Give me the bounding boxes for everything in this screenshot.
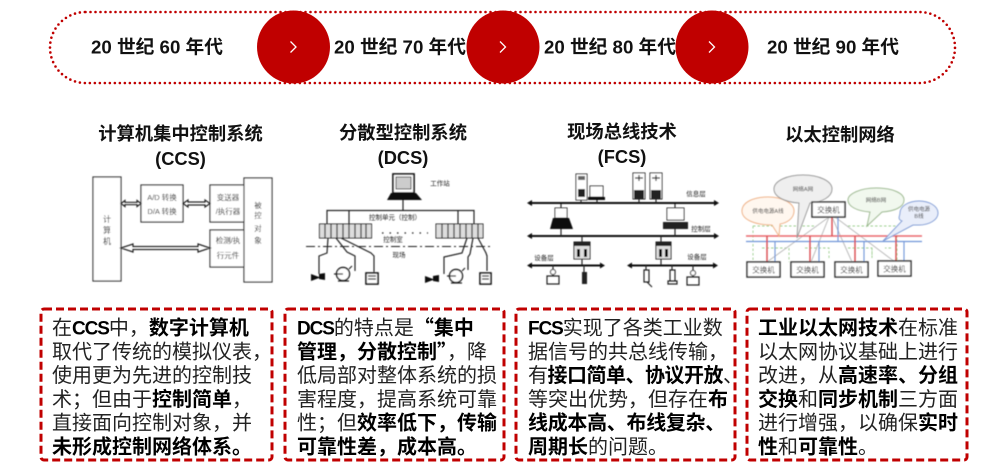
panel: Ethernet description: 性和可靠性。 [758,436,878,458]
panel: CCS description: 使用更为先进的控制技 [52,364,252,387]
panel: DCS description: 害程度，提高系统可靠 [297,388,497,411]
diagram: CCS block diagram: 算 [103,225,111,235]
heading: FCS [567,121,677,167]
callout: blue [883,201,938,241]
diagram: DCS architecture: 现场 [392,250,406,259]
panel: CCS description [41,309,272,460]
panel: DCS description: 管理，分散控制”，降 [297,335,487,364]
diagram: CCS block diagram: 计 [103,214,111,224]
label: 1990s: 20 世纪 90 年代 [767,36,899,58]
heading: CCS [98,123,263,169]
diagram: CCS block diagram: 变送器 [217,192,240,202]
timeline: decades [50,10,955,84]
heading: DCS: (DCS) [378,147,428,168]
diagram: DCS architecture: 控制单元（控制） [369,212,421,222]
panel: FCS description: 线成本高、布线复杂、 [528,411,725,435]
panel: DCS description: 性；但效率低下，传输 [297,412,497,435]
diagram: CCS block diagram: 象 [254,235,262,245]
diagram: CCS block diagram: 被 [254,200,262,210]
panel: FCS description: 据信号的共总线传输， [528,340,728,363]
panel: Ethernet description: 进行增强，以确保实时 [758,411,958,435]
switch: top: 交换机 [817,204,840,214]
diagram: CCS block diagram: /执行器 [216,206,241,216]
arrow node 3 [676,10,748,84]
diagram: DCS architecture: 控制室 [383,234,403,244]
diagram: CCS block diagram [93,177,272,282]
diagram: FCS bus topology: 设备层 [687,252,707,261]
callout: gray [774,175,832,238]
switch: top [812,202,845,217]
heading: FCS: (FCS) [598,146,646,167]
diagram: CCS block diagram: 控 [254,210,262,220]
callout: blue: 供电电源 [908,205,930,213]
diagram: CCS block diagram: 检测/执 [216,235,241,245]
callout: orange: 供电电源A线 [752,207,784,215]
heading: DCS: 分散型控制系统 [339,122,467,143]
diagram: CCS block diagram: 机 [103,236,111,246]
heading: DCS [339,122,467,168]
arrow node 1 [257,10,330,84]
switch: 3: 交换机 [840,264,863,274]
panel: Ethernet description: 改进，从高速率、分组 [758,363,958,387]
switch: 3 [835,262,868,277]
heading: Ethernet: 以太控制网络 [785,124,895,145]
panel: CCS description: 取代了传统的模拟仪表， [52,340,272,363]
panel: CCS description: 未形成控制网络体系。 [52,434,252,458]
diagram: CCS block diagram: D/A 转换 [147,206,177,216]
panel: FCS description [516,309,742,460]
switch: 4: 交换机 [883,264,906,274]
panel: Ethernet description: 交换和同步机制三方面 [758,387,958,411]
callout: gray: 网络A网 [793,185,814,193]
switch: 2: 交换机 [796,264,819,274]
panel: FCS description: 周期长的问题。 [528,436,668,458]
switch: 4 [878,261,911,276]
panel: CCS description: 术；但由于控制简单， [52,388,252,411]
panel: FCS description: FCS实现了各类工业数 [528,316,723,340]
panel: DCS description: 低局部对整体系统的损 [297,364,497,387]
panel: FCS description: 等突出优势，但存在布 [528,388,728,411]
panel: CCS description: 直接面向控制对象，并 [52,412,252,435]
label: 1970s: 20 世纪 70 年代 [334,36,466,58]
callout: orange [742,197,794,236]
diagram: FCS bus topology: 设备层 [534,253,554,262]
heading: CCS: 计算机集中控制系统 [98,123,263,144]
label: 1960s: 20 世纪 60 年代 [91,36,223,58]
heading: FCS: 现场总线技术 [567,121,677,142]
diagram: CCS block diagram: 对 [254,223,262,233]
label: 1980s: 20 世纪 80 年代 [544,36,676,58]
panel: CCS description: 在CCS中，数字计算机 [52,316,249,340]
panel: DCS description [285,309,504,460]
callout: green [848,188,904,226]
arrow node 2 [466,10,540,84]
switch: 1: 交换机 [752,264,775,274]
switch: 2 [791,262,824,277]
panel: Ethernet description: 以太网协议基础上进行 [758,340,958,363]
diagram: CCS block diagram: A/D 转换 [147,192,177,202]
callout: blue: B线 [914,212,924,220]
heading: CCS: (CCS) [155,148,206,169]
panel: FCS description: 有接口简单、协议开放、 [528,364,742,387]
panel: DCS description: 可靠性差，成本高。 [297,434,477,458]
diagram: DCS architecture: 工作站 [430,178,450,188]
callout: green: 网络B网 [866,196,887,204]
diagram: FCS bus topology: 控制层 [691,224,711,233]
diagram: FCS bus topology: 信息层 [686,189,706,198]
switch: 1 [747,262,780,277]
panel: Ethernet description [747,309,967,460]
panel: DCS description: DCS的特点是“集中 [297,312,474,340]
diagram: industrial Ethernet [742,175,938,277]
panel: Ethernet description: 工业以太网技术在标准 [758,316,958,340]
diagram: FCS bus topology [527,173,719,287]
diagram: CCS block diagram: 行元件 [217,250,240,260]
diagram: DCS architecture [306,174,492,284]
